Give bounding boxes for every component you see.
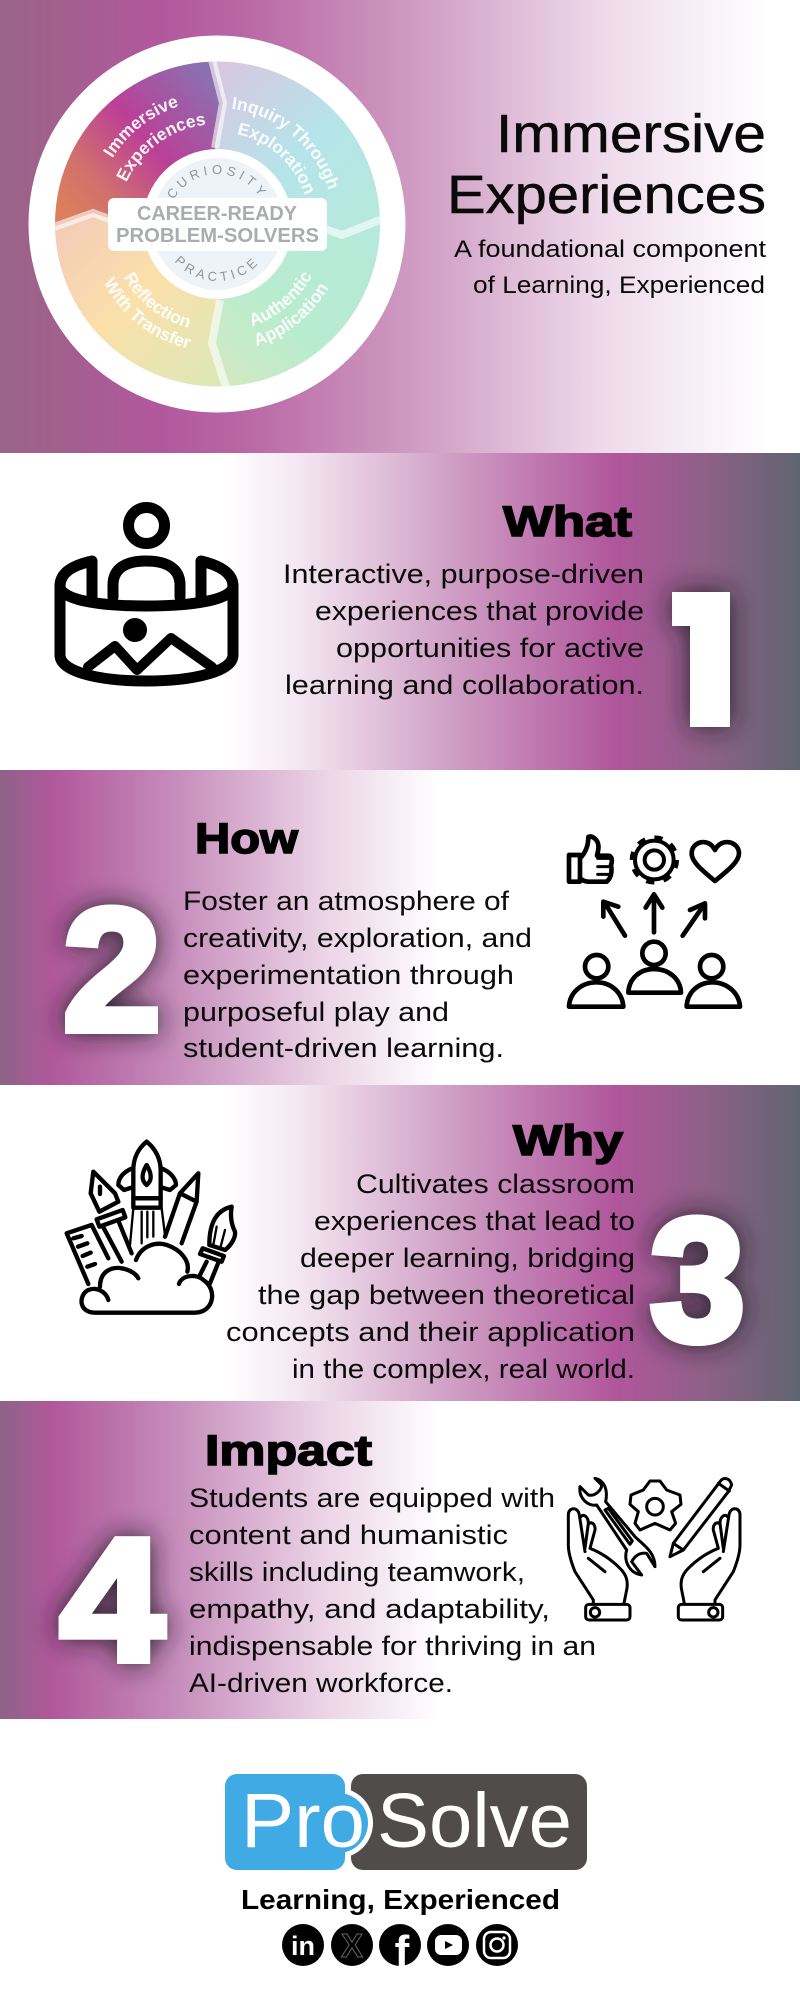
- label: Immersive Experiences segment: Experiences: [116, 116, 206, 182]
- arrows: [603, 894, 705, 936]
- right hand: [681, 1509, 740, 1603]
- panel: what: [0, 453, 800, 770]
- gear: [630, 1481, 681, 1530]
- pencil: [670, 1479, 732, 1557]
- panel: header: [0, 0, 766, 453]
- label: Curiosity arc: CURIOSITY: [168, 165, 266, 198]
- icon: hands with wrench, gear and pencil: [568, 1478, 740, 1620]
- left hand: [568, 1509, 627, 1603]
- chart: learning wheel: [28, 36, 406, 412]
- text block: why: in the complex, real world.: [292, 1354, 635, 1384]
- title: Experiences: [447, 165, 766, 225]
- text block: why: deeper learning, bridging: [300, 1243, 635, 1273]
- paintbrush: [209, 1207, 235, 1250]
- label: career-ready problem-solvers: PROBLEM-SOLVERS: [116, 224, 319, 247]
- cloud: [82, 1250, 209, 1313]
- social icons: [282, 1924, 518, 1976]
- text block: what: Interactive, purpose-driven: [283, 559, 644, 589]
- text block: impact: skills including teamwork,: [189, 1557, 525, 1587]
- icon: person inside immersive screen: [60, 508, 233, 681]
- text block: what: learning and collaboration.: [285, 670, 644, 700]
- label: Authentic Application segment: Application: [256, 284, 328, 346]
- label: Inquiry Through Exploration segment: Inquiry Through: [232, 97, 338, 190]
- icon: youtube: [427, 1924, 469, 1966]
- rocket: [133, 1142, 161, 1198]
- icon: linkedin: in: [291, 1931, 315, 1961]
- pen: [91, 1172, 118, 1212]
- tagline: Learning, Experienced: [241, 1884, 560, 1915]
- text block: why: concepts and their application: [226, 1317, 635, 1347]
- heading: impact: Impact: [205, 1427, 372, 1475]
- heading: why: Why: [513, 1117, 623, 1165]
- panel: how: [0, 770, 800, 1085]
- people: [569, 942, 740, 1007]
- icon: instagram: [476, 1924, 518, 1966]
- number 3: 3: [650, 1182, 745, 1377]
- icon: linkedin: [282, 1924, 324, 1966]
- label: Practice arc: PRACTICE: [175, 256, 258, 281]
- text block: impact: Students are equipped with: [189, 1483, 555, 1513]
- subtitle: A foundational component: [454, 236, 766, 263]
- icon: facebook: [379, 1924, 421, 1976]
- logo: ProSolve: Solve: [377, 1778, 572, 1864]
- pencil: [165, 1173, 198, 1243]
- icon: heart: [692, 842, 739, 881]
- number 2: 2: [63, 872, 161, 1067]
- text block: how: creativity, exploration, and: [183, 923, 532, 953]
- text block: why: Cultivates classroom: [356, 1169, 635, 1199]
- text block: why: experiences that lead to: [314, 1206, 635, 1236]
- text block: impact: [189, 1483, 596, 1698]
- title: [447, 104, 766, 225]
- label: career-ready problem-solvers: CAREER-READY: [137, 202, 297, 225]
- heading: how: How: [195, 815, 299, 863]
- title: Immersive: [496, 104, 766, 164]
- text block: impact: content and humanistic: [189, 1520, 508, 1550]
- subtitle: [454, 236, 766, 299]
- icon: facebook: f: [395, 1927, 410, 1976]
- logo: ProSolve: Pro: [241, 1778, 365, 1864]
- heading: what: What: [503, 498, 632, 546]
- text block: impact: empathy, and adaptability,: [189, 1594, 550, 1624]
- label: Immersive Experiences segment: Immersive: [103, 98, 178, 158]
- number 4: 4: [60, 1502, 164, 1697]
- label: Reflection With Transfer segment: Reflection: [124, 272, 190, 328]
- panel: why: [0, 1085, 800, 1401]
- text block: why: [226, 1169, 635, 1384]
- wrench: [580, 1478, 655, 1575]
- text block: why: the gap between theoretical: [258, 1280, 635, 1310]
- text block: impact: indispensable for thriving in an: [189, 1631, 596, 1661]
- label: Authentic Application segment: Authentic: [252, 272, 311, 326]
- icon: x: X: [341, 1927, 363, 1964]
- label: Inquiry Through Exploration segment: Exploration: [238, 122, 313, 194]
- icon: thumbs up: [569, 837, 612, 882]
- label: Reflection With Transfer segment: With Transfer: [104, 276, 191, 348]
- text block: what: experiences that provide: [315, 596, 644, 626]
- text block: what: opportunities for active: [336, 633, 644, 663]
- text block: how: [183, 886, 532, 1063]
- text block: how: experimentation through: [183, 960, 514, 990]
- icon: people with thumb, gear and heart: [569, 837, 740, 1007]
- text block: impact: AI-driven workforce.: [189, 1668, 453, 1698]
- label: career-ready problem-solvers: [116, 202, 319, 247]
- icon: gear: [632, 838, 676, 882]
- subtitle: of Learning, Experienced: [473, 272, 765, 299]
- text block: what: [283, 559, 644, 700]
- text block: how: student-driven learning.: [183, 1033, 504, 1063]
- ruler: [67, 1225, 108, 1284]
- text block: how: Foster an atmosphere of: [183, 886, 510, 916]
- icon: x: [331, 1924, 373, 1966]
- icon: rocket and art tools: [67, 1142, 235, 1313]
- panel: impact: [0, 1401, 800, 1719]
- text block: how: purposeful play and: [183, 997, 449, 1027]
- logo: ProSolve: [225, 1774, 587, 1870]
- number 1: 1: [654, 566, 746, 765]
